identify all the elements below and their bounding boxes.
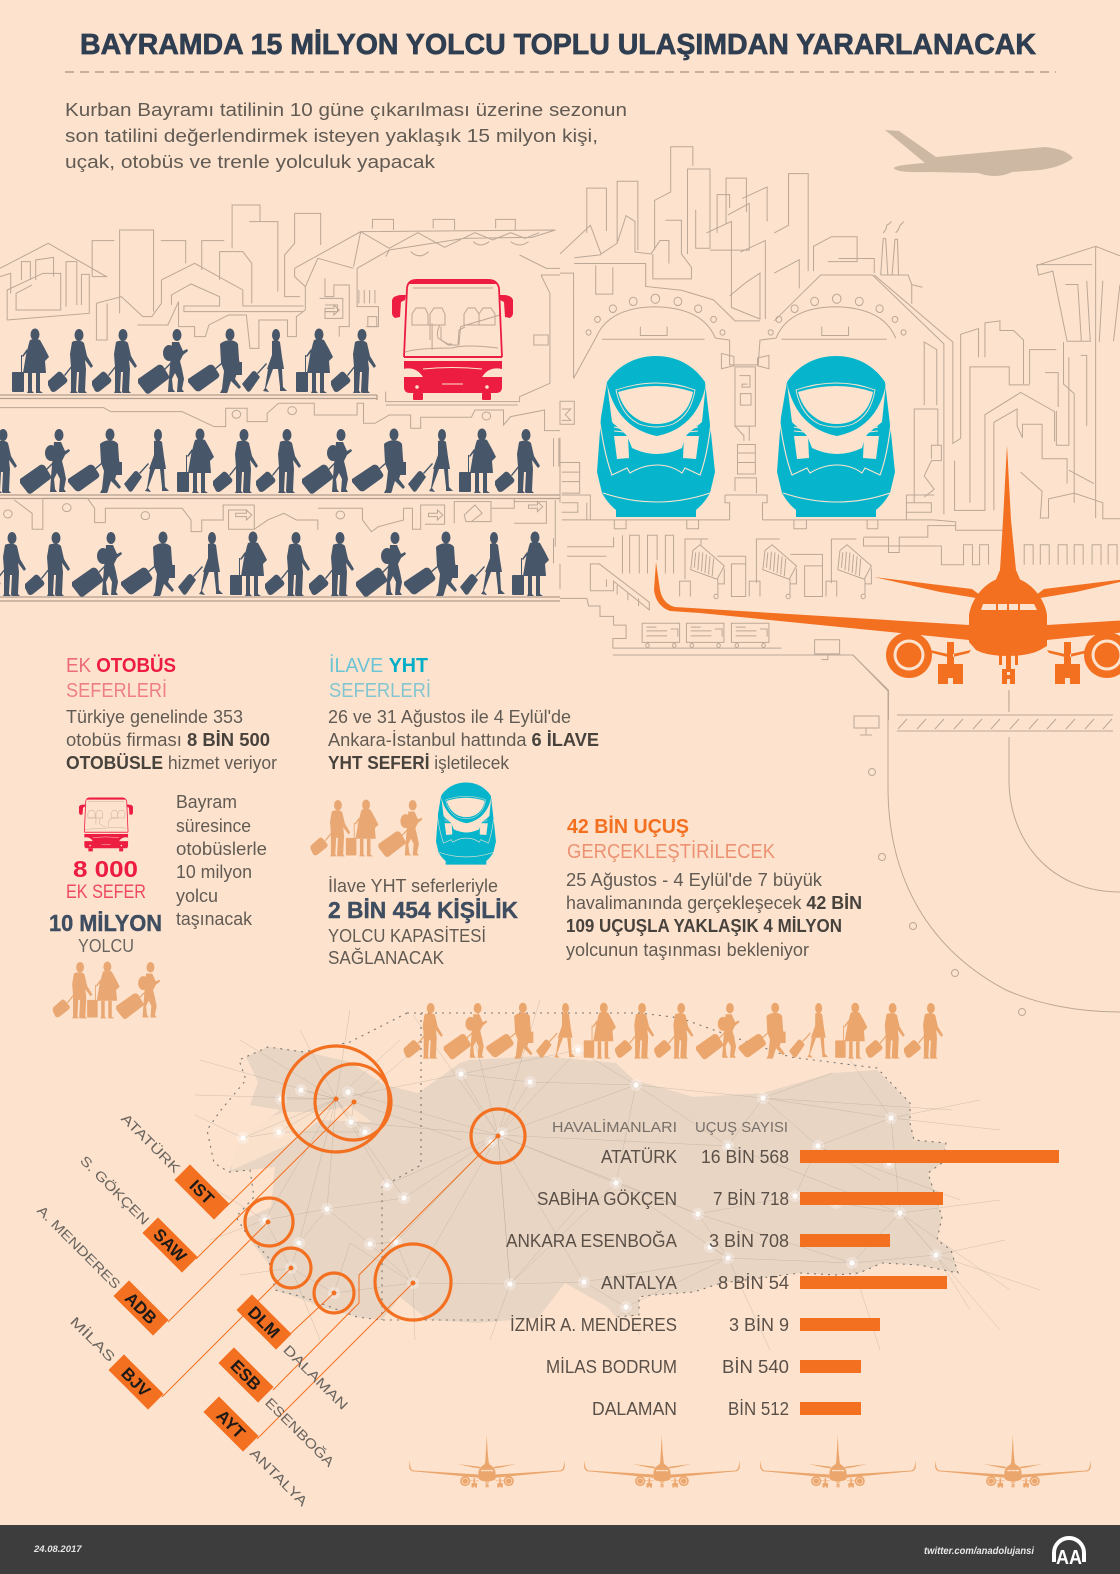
icons: baggage carts [642, 545, 871, 647]
passenger queue: orange row above map [404, 1003, 943, 1059]
chart column headings: HAVALİMANLARI [552, 1118, 677, 1136]
tag: ADB [113, 1280, 169, 1336]
heading: 42 bin uçuş [567, 815, 776, 863]
text: yht description [328, 707, 599, 773]
city line art: left [0, 205, 560, 563]
chart values: 3 BİN 9 [729, 1315, 789, 1335]
tag: ESB: ESB [227, 1356, 265, 1394]
text: yht capacity: SAĞLANACAK [328, 947, 444, 968]
icon: high speed train right [777, 356, 895, 517]
heading: ek otobüs seferleri [66, 654, 176, 702]
panel: bus services [49, 654, 277, 1019]
heading: ek otobüs seferleri: SEFERLERİ [66, 679, 167, 702]
tag: DLM: DLM [244, 1303, 283, 1342]
icon: large orange airplane [654, 445, 1120, 684]
airport name labels: MİLAS [67, 1314, 118, 1365]
text: bus description [66, 707, 277, 773]
chart labels: ATATÜRK [601, 1147, 677, 1167]
chart column headings: UÇUŞ SAYISI [695, 1120, 788, 1136]
map of Turkey [195, 1000, 1040, 1350]
stat: 10 million passengers [49, 910, 162, 956]
tag: ADB: ADB [121, 1289, 160, 1328]
passenger queue: row 1 [12, 328, 376, 394]
airport name labels: ESENBOĞA [262, 1395, 337, 1470]
chart values: 7 BİN 718 [713, 1189, 789, 1209]
stat: 8 000 extra trips: 8 000 [73, 856, 138, 882]
chart labels: DALAMAN [592, 1399, 677, 1419]
tag: IST [174, 1164, 230, 1220]
icon: red bus [392, 279, 513, 400]
icon: passengers [53, 962, 160, 1019]
footer bar [0, 1525, 1120, 1574]
chart column headings [552, 1118, 788, 1136]
tag: DLM [236, 1294, 292, 1350]
text: flights description: 109 UÇUŞLA YAKLAŞIK 4 MİLYON [566, 916, 842, 936]
passenger queue: row 2 [0, 428, 540, 494]
tag: IST: IST [186, 1176, 218, 1209]
icon: small bus [79, 797, 133, 851]
chart values: 8 BİN 54 [718, 1273, 789, 1293]
chart labels: ANTALYA [601, 1273, 677, 1293]
heading: ek otobüs seferleri: EK OTOBÜS [66, 654, 176, 677]
airport name labels: DALAMAN [280, 1342, 351, 1413]
text: bus side note: Bayram [176, 792, 237, 812]
text: bus side note: taşınacak [176, 909, 253, 929]
intro text [65, 100, 627, 172]
chart bars [800, 1150, 1059, 1415]
heading: ilave yht seferleri: İLAVE YHT [329, 654, 428, 677]
tag: BJV [108, 1354, 164, 1410]
airport code tags [108, 1164, 292, 1452]
social handle: twitter.com/anadolujansi [924, 1545, 1035, 1557]
logo: AA: AA [1056, 1547, 1082, 1569]
text: yht capacity [328, 876, 518, 968]
tag: ESB [218, 1347, 274, 1403]
icon: distant airplane [885, 130, 1073, 176]
stat: 8 000 extra trips: EK SEFER [66, 882, 146, 903]
text: yht capacity: YOLCU KAPASİTESİ [328, 926, 486, 946]
chart values: BİN 540 [722, 1357, 789, 1377]
flight network lines [195, 1000, 1040, 1350]
floor lines [0, 395, 560, 601]
text: flights description: 25 Ağustos - 4 Eylül'de 7 büyük [566, 870, 823, 890]
date: 24.08.2017 [33, 1544, 82, 1555]
text: bus description: OTOBÜSLE hizmet veriyor [66, 753, 277, 773]
text: bus description: otobüs firması 8 BİN 500 [66, 730, 270, 750]
tag: BJV: BJV [117, 1364, 155, 1401]
logo: AA [1054, 1538, 1084, 1569]
stat: 10 million passengers: YOLCU [78, 936, 134, 956]
intro text: son tatilini değerlendirmek isteyen yaklaşık 15 milyon kişi, [65, 126, 598, 146]
text: bus side note: 10 milyon [176, 862, 252, 882]
text: bus side note: otobüslerle [176, 839, 267, 859]
title: BAYRAMDA 15 MİLYON YOLCU TOPLU ULAŞIMDAN YARARLANACAK [80, 29, 1036, 61]
heading: ilave yht seferleri: SEFERLERİ [329, 679, 431, 702]
heading: 42 bin uçuş: 42 BİN UÇUŞ [567, 815, 689, 838]
icon: high speed train left [597, 356, 715, 517]
icon: passengers [311, 800, 422, 857]
text: yht description: 26 ve 31 Ağustos ile 4 Eylül'de [328, 707, 571, 727]
airport circles and leader lines [162, 1046, 525, 1439]
tag: SAW [142, 1217, 198, 1273]
chart values [701, 1147, 789, 1419]
runway and taxiway lines [840, 655, 1120, 1016]
border dotted outline [207, 1013, 958, 1320]
text: flights description: havalimanında gerçekleşecek 42 BİN [566, 893, 862, 913]
airport name labels: ANTALYA [247, 1446, 310, 1509]
text: bus side note: yolcu [176, 886, 218, 906]
airport name labels: S. GÖKÇEN [77, 1153, 152, 1228]
airport nodes [237, 1044, 942, 1313]
chart labels: SABİHA GÖKÇEN [537, 1189, 677, 1209]
chart labels [506, 1147, 677, 1419]
city line art: right [560, 147, 1120, 720]
stat: 10 million passengers: 10 MİLYON [49, 910, 162, 936]
chart values: 16 BİN 568 [701, 1147, 789, 1167]
chart labels: MİLAS BODRUM [546, 1357, 677, 1377]
chart labels: İZMİR A. MENDERES [510, 1315, 677, 1335]
heading: 42 bin uçuş: GERÇEKLEŞTİRİLECEK [567, 840, 776, 863]
airport name labels: ATATÜRK [118, 1111, 183, 1176]
stat: 8 000 extra trips [66, 856, 146, 903]
text: bus description: Türkiye genelinde 353 [66, 707, 243, 727]
text: yht description: Ankara-İstanbul hattında 6 İLAVE [328, 730, 599, 750]
airport name labels: A. MENDERES [34, 1203, 123, 1292]
heading: ilave yht seferleri [329, 654, 431, 702]
text: bus side note: süresince [176, 816, 251, 836]
passenger queue: row 3 [0, 532, 549, 597]
tag: SAW: SAW [149, 1225, 191, 1266]
tag: AYT [203, 1396, 259, 1452]
panel: YHT services [311, 654, 599, 968]
bar chart: flights per airport [506, 1118, 1059, 1419]
chart labels: ANKARA ESENBOĞA [506, 1230, 677, 1251]
text: bus side note [176, 792, 267, 929]
text: yht description: YHT SEFERİ işletilecek [328, 753, 510, 773]
text: yht capacity: 2 BİN 454 KİŞİLİK [328, 897, 518, 923]
intro text: Kurban Bayramı tatilinin 10 güne çıkarılması üzerine sezonun [65, 100, 627, 120]
panel: flights [566, 815, 862, 960]
intro text: uçak, otobüs ve trenle yolculuk yapacak [65, 152, 436, 172]
chart values: BİN 512 [728, 1399, 789, 1419]
chart values: 3 BİN 708 [709, 1231, 789, 1251]
text: yht capacity: İlave YHT seferleriyle [328, 876, 498, 896]
icon: small train [436, 782, 496, 865]
text: flights description [566, 870, 862, 960]
tag: AYT: AYT [212, 1406, 249, 1443]
icons: row of small airplanes [409, 1435, 1091, 1487]
airport name labels [34, 1111, 351, 1509]
text: flights description: yolcunun taşınması bekleniyor [566, 940, 809, 960]
